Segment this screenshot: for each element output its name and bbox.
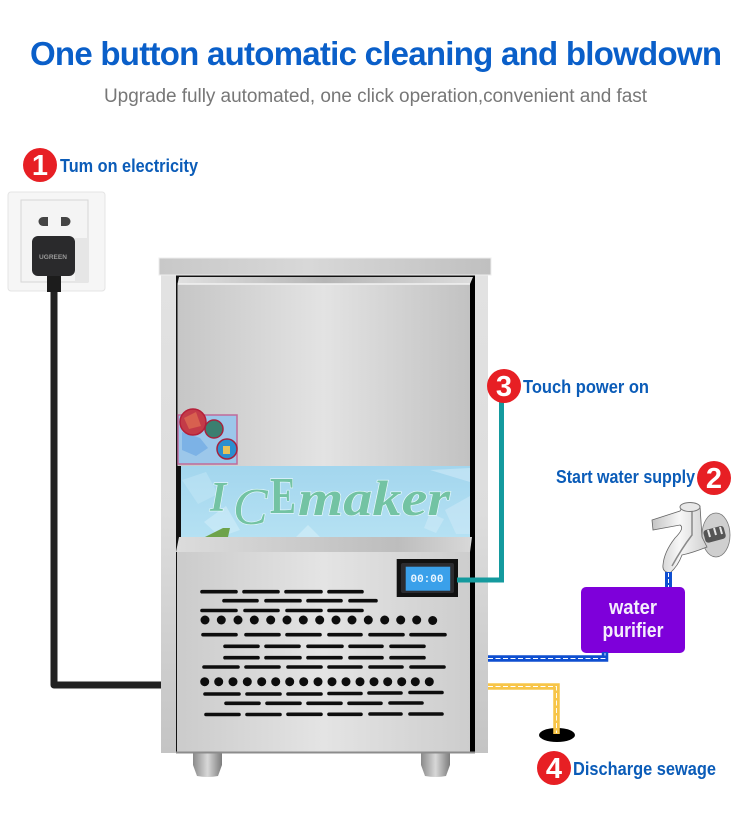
machine body sides: [161, 275, 488, 753]
power cable: [54, 276, 161, 685]
step 3 label: 3: [496, 371, 512, 403]
ventilation slots: [202, 592, 445, 714]
top cover: [159, 258, 491, 275]
ice maker machine: [159, 258, 491, 777]
Ice maker banner: C: [233, 479, 269, 536]
blue inlet pipe: tap to purifier: [665, 572, 672, 588]
step 4 label: Discharge sewage: [573, 759, 716, 779]
step 2 label: 2: [706, 463, 722, 495]
step 4 label: 4: [546, 753, 562, 785]
subtitle: Upgrade fully automated, one click operation,convenient and fast: [104, 86, 648, 107]
icon: water tap: [652, 502, 730, 573]
teal power line: [457, 400, 502, 580]
lower shelf: [176, 537, 472, 552]
title: One button automatic cleaning and blowdown: [30, 35, 722, 72]
Ice maker banner: maker: [298, 470, 451, 526]
water purifier box: water: [608, 597, 657, 619]
step 1 label: 1: [32, 150, 48, 182]
upper door panel: [178, 277, 473, 466]
step 2 label: Start water supply: [556, 467, 695, 487]
step 4 label: [537, 751, 716, 785]
Ice maker banner: E: [270, 468, 296, 525]
ventilation holes: [200, 616, 437, 686]
icon: wall socket with plug: [8, 192, 105, 292]
step 3 label: Touch power on: [523, 377, 649, 397]
machine feet: [193, 753, 450, 777]
icon: wall socket with plug: UGREEN: [39, 254, 67, 261]
control display: 00:00: [410, 574, 444, 586]
Ice maker banner: I: [209, 475, 228, 521]
control display: [397, 559, 458, 597]
step 1 label: Tum on electricity: [60, 156, 198, 176]
lower front panel: [176, 552, 475, 754]
yellow drain pipe: [488, 686, 575, 742]
step 1 label: [23, 148, 198, 182]
promo sticker: [178, 409, 237, 464]
blue outlet pipe: purifier to machine: [488, 652, 605, 658]
step 3 label: [487, 369, 649, 403]
step 2 label: [556, 461, 731, 495]
Ice maker banner: [181, 466, 470, 537]
water purifier box: purifier: [602, 620, 664, 642]
water purifier box: [581, 587, 685, 653]
